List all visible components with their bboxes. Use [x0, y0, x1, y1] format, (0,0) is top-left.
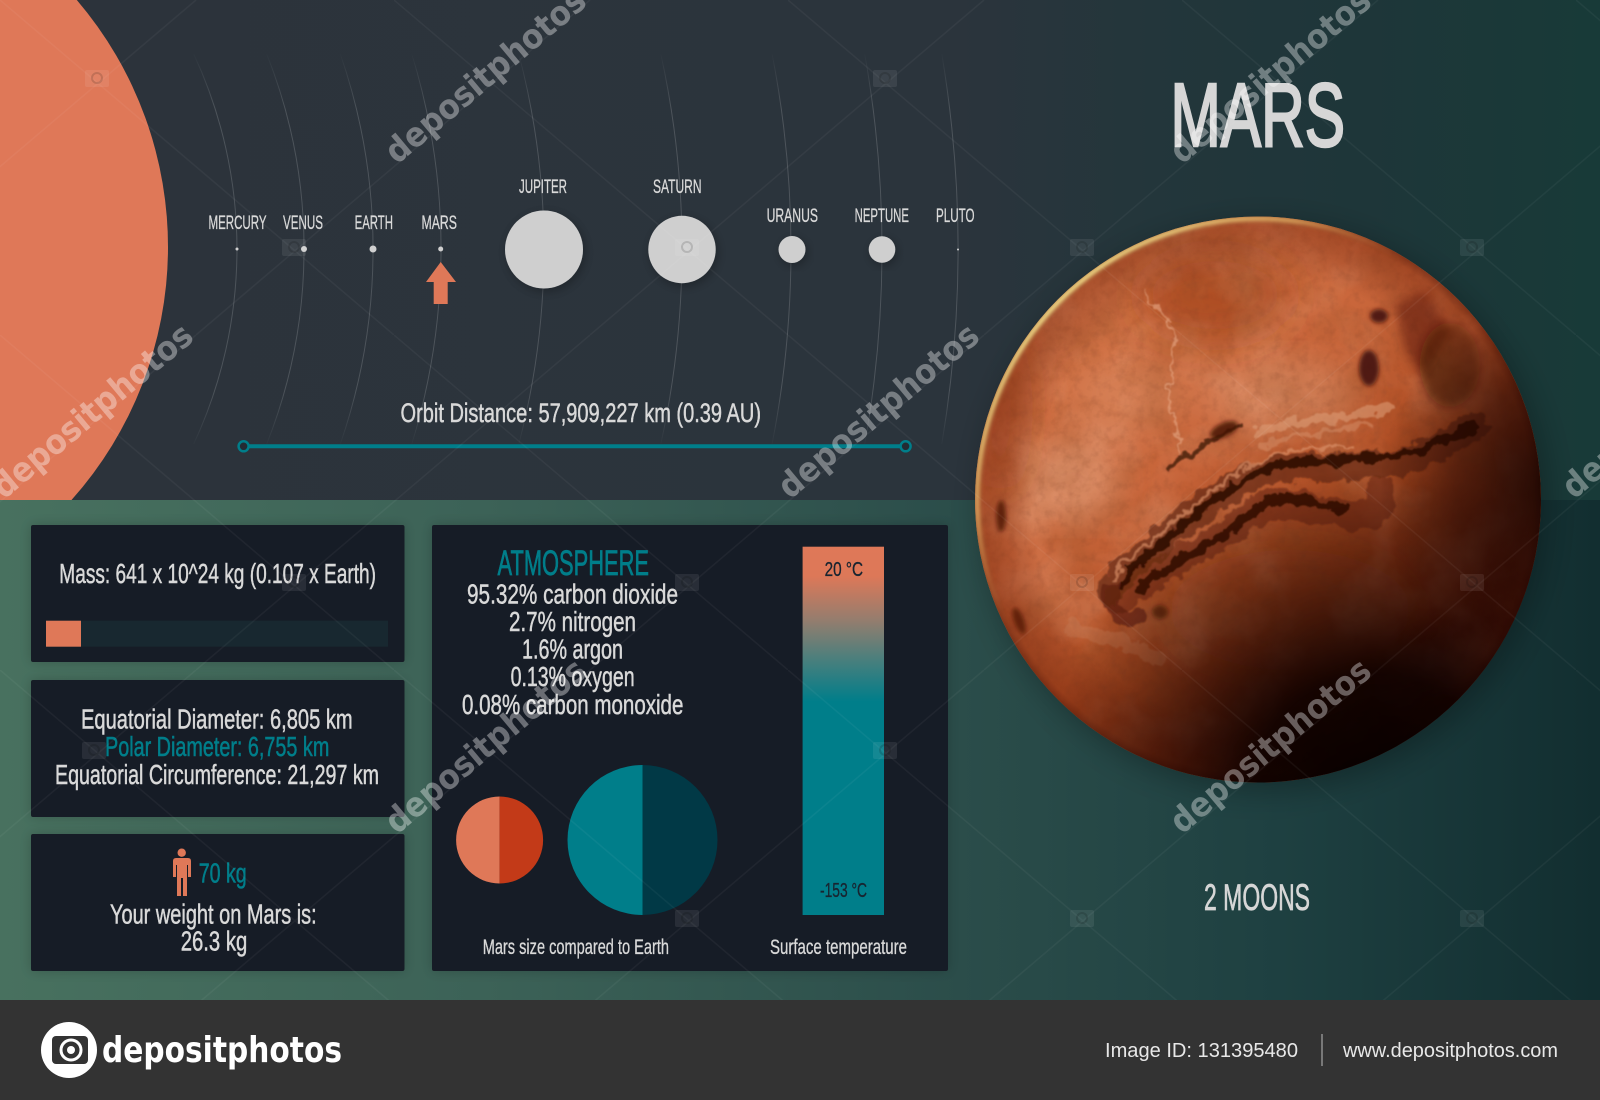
atmosphere composition list: 0.08% carbon monoxide: [462, 689, 683, 720]
arrow: Mars marker: [426, 262, 456, 304]
planet: Neptune: NEPTUNE: [855, 206, 909, 227]
moons label: 2 MOONS: [1204, 877, 1310, 918]
planet: Pluto: [936, 206, 974, 250]
planet: Uranus: [767, 206, 818, 263]
planet: Pluto: PLUTO: [936, 206, 974, 227]
panel: atmosphere, size, temperature: [432, 525, 948, 971]
mass text: Mass: 641 x 10^24 kg (0.107 x Earth): [59, 558, 376, 589]
planet: Jupiter: [505, 177, 583, 288]
website: www.depositphotos.com: [1342, 1040, 1558, 1062]
weight on Mars text: [110, 898, 317, 957]
atmosphere composition list: [462, 578, 683, 720]
temperature bar: 20 °C: [825, 559, 863, 581]
background: green lower area: [0, 500, 1600, 1000]
planet: Mercury: MERCURY: [208, 213, 267, 234]
background: dark upper area: [0, 0, 1600, 500]
title: MARS: [1170, 66, 1345, 166]
orbit distance label: Orbit Distance: 57,909,227 km (0.39 AU): [400, 398, 761, 428]
planet: Venus: [283, 213, 323, 252]
orbit distance line: [239, 441, 911, 451]
atmosphere composition list: 1.6% argon: [522, 633, 623, 664]
panel: mass: [31, 525, 404, 662]
equatorial circumference: Equatorial Circumference: 21,297 km: [55, 759, 379, 790]
light highlands: [1021, 357, 1360, 522]
planet: Earth: [355, 213, 393, 252]
watermark: depositphotos text: depositphotos: [1162, 651, 1379, 842]
dark north-east region: [1395, 290, 1480, 407]
footer bar: [0, 1000, 1600, 1100]
watermark: camera icons: [82, 70, 1484, 927]
canyon: Valles Marineris: [1070, 292, 1475, 660]
orbit arcs: [194, 54, 958, 444]
planet Mars image: [975, 216, 1547, 790]
planet: Saturn: [648, 177, 716, 283]
sun: [0, 0, 168, 500]
planet: Mars: [422, 213, 457, 252]
panel: diameters: [31, 680, 404, 817]
watermark: depositphotos text: [0, 0, 1600, 842]
equatorial diameter: Equatorial Diameter: 6,805 km: [81, 703, 353, 734]
weight on Mars text: 26.3 kg: [181, 926, 247, 957]
weight on Mars text: Your weight on Mars is:: [110, 898, 317, 929]
planets row: [208, 177, 974, 304]
planet: Venus: VENUS: [283, 213, 323, 234]
mass bar: [46, 621, 388, 647]
temperature bar: [803, 547, 884, 915]
logo wordmark: depositphotos: [102, 1030, 342, 1071]
planet: Mercury: [208, 213, 267, 250]
watermark: depositphotos text: depositphotos: [377, 651, 594, 842]
planet: Jupiter: JUPITER: [519, 177, 567, 198]
icon: person: [173, 848, 191, 896]
reference weight: 70 kg: [199, 858, 247, 889]
atmosphere composition list: 0.13% oxygen: [511, 661, 635, 692]
planet: Mars: MARS: [422, 213, 457, 234]
atmosphere composition list: 2.7% nitrogen: [509, 606, 636, 637]
Earth size circle: [568, 765, 718, 915]
footer divider: [1322, 1034, 1323, 1066]
icon: depositphotos logo: [41, 1022, 97, 1078]
image id: Image ID: 131395480: [1105, 1040, 1298, 1062]
polar diameter: Polar Diameter: 6,755 km: [105, 731, 329, 762]
watermark: depositphotos text: depositphotos: [770, 316, 987, 507]
temperature bar: -153 °C: [820, 880, 867, 902]
dark spots: [996, 309, 1388, 636]
panel: weight: [31, 834, 404, 971]
planet: Earth: EARTH: [355, 213, 393, 234]
temperature caption: Surface temperature: [770, 936, 907, 959]
atmosphere composition list: 95.32% carbon dioxide: [467, 578, 678, 609]
atmosphere heading: ATMOSPHERE: [498, 544, 649, 583]
planet: Saturn: SATURN: [653, 177, 702, 198]
planet: Uranus: URANUS: [767, 206, 818, 227]
planet: Neptune: [855, 206, 909, 263]
dark plains: [988, 246, 1300, 478]
Mars size circle: [456, 796, 543, 884]
size caption: Mars size compared to Earth: [483, 936, 669, 959]
